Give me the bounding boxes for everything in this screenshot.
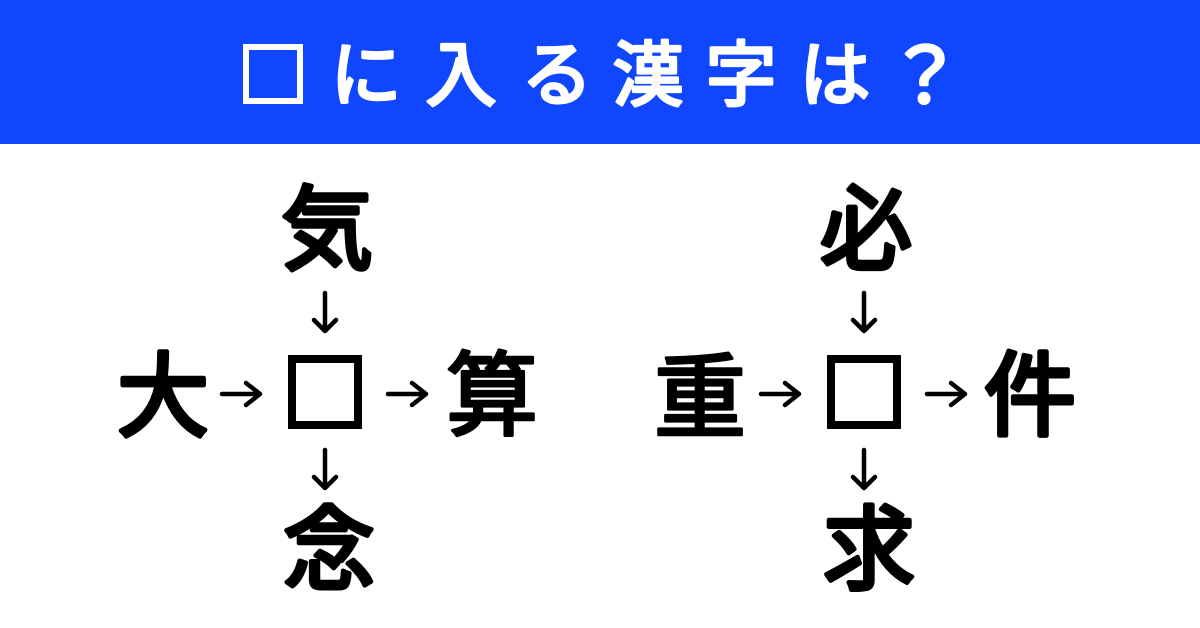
arrow: box to right xyxy=(388,383,426,405)
puzzle: right xyxy=(654,180,1076,602)
arrow: left to box xyxy=(761,383,799,405)
kanji: left: 大 xyxy=(117,347,209,449)
title: は xyxy=(799,37,871,116)
blank box xyxy=(831,359,897,425)
arrow: top to box xyxy=(314,293,336,331)
kanji: right: 件 xyxy=(984,346,1076,448)
title: 漢 xyxy=(612,37,684,116)
arrow: top to box xyxy=(853,293,875,331)
arrow: box to bottom xyxy=(853,450,875,488)
title: る xyxy=(521,37,593,116)
header band xyxy=(0,0,1200,144)
kanji: top: 気 xyxy=(281,180,373,282)
kanji: left: 重 xyxy=(654,348,746,450)
title: 字 xyxy=(705,37,777,116)
kanji: bottom: 求 xyxy=(823,500,915,602)
arrow: left to box xyxy=(222,383,260,405)
title xyxy=(246,35,963,120)
arrow: box to right xyxy=(927,383,965,405)
title: に xyxy=(330,37,402,116)
blank box xyxy=(292,359,358,425)
kanji: bottom: 念 xyxy=(283,500,375,602)
puzzle: left xyxy=(117,180,538,602)
arrow: box to bottom xyxy=(314,450,336,488)
title: ？ xyxy=(887,35,963,120)
kanji: right: 算 xyxy=(446,346,538,448)
title: 入 xyxy=(425,37,497,116)
kanji: top: 必 xyxy=(820,180,912,282)
